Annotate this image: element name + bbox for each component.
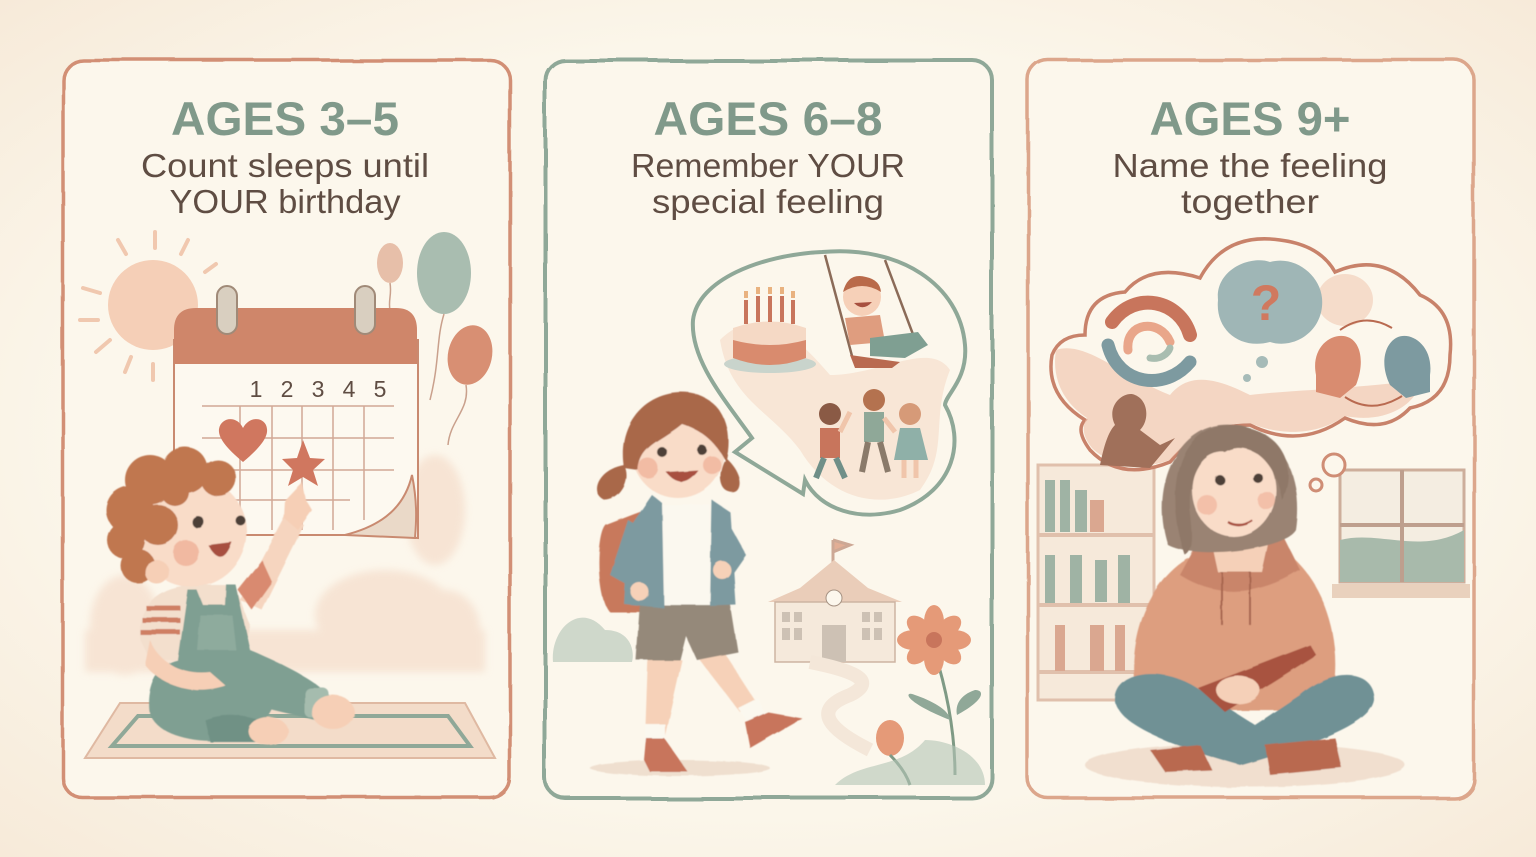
heading: ages 3-5: AGES 3–5 [171, 92, 399, 145]
thought cloud [1051, 239, 1451, 491]
bookshelf [1038, 465, 1154, 700]
head [137, 477, 247, 587]
text: count sleeps: Count sleeps until [141, 147, 429, 184]
panel: ages 3-5 [63, 60, 510, 798]
thought dots [1310, 454, 1345, 491]
icon: question cloud: ? [1251, 275, 1281, 331]
school building [768, 540, 902, 662]
window [1332, 470, 1470, 598]
hair back [1162, 425, 1298, 552]
striped shirt [139, 585, 250, 660]
bushes [553, 618, 633, 662]
icon: cake [724, 287, 816, 373]
icon: question cloud [1218, 260, 1322, 382]
icon: swing child [825, 255, 928, 368]
text: your birthday: YOUR birthday [170, 183, 401, 220]
text: remember: Remember YOUR [631, 147, 905, 184]
calendar numbers: 1 [250, 376, 262, 402]
calendar numbers [250, 376, 386, 402]
illustration: toddler [106, 447, 354, 745]
text: special feeling: special feeling [652, 183, 884, 220]
icon: balloons [377, 232, 498, 445]
speech bubble [693, 251, 965, 515]
watercolor cloud background [85, 455, 485, 675]
icon: swirl [1108, 303, 1190, 381]
panel: ages 9+ [1028, 60, 1474, 798]
curly hair [106, 447, 236, 583]
panel: ages 6-8 [545, 60, 992, 798]
icon: calendar [174, 286, 418, 538]
illustration: teen writing [1085, 425, 1405, 787]
calendar numbers: 2 [281, 376, 293, 402]
path [810, 662, 870, 750]
icon: two heads [1315, 320, 1430, 406]
icon: heart [219, 419, 267, 462]
calendar numbers: 4 [343, 376, 356, 402]
heading: ages 9+: AGES 9+ [1150, 92, 1350, 145]
pigtails [597, 458, 740, 500]
raised arm [240, 515, 304, 610]
calendar numbers: 3 [312, 376, 324, 402]
illustration: girl with backpack [590, 392, 802, 776]
heading: ages 6-8: AGES 6–8 [654, 92, 882, 145]
text: name the feeling: Name the feeling [1112, 147, 1388, 184]
icon: three friends [816, 389, 928, 478]
icon: person silhouette [1100, 394, 1175, 468]
icon: sun [80, 232, 216, 380]
icon: star [282, 440, 325, 486]
rug [85, 703, 495, 758]
text: together: together [1181, 183, 1319, 220]
calendar numbers: 5 [374, 376, 386, 402]
flower [835, 605, 985, 785]
overalls [149, 585, 328, 741]
